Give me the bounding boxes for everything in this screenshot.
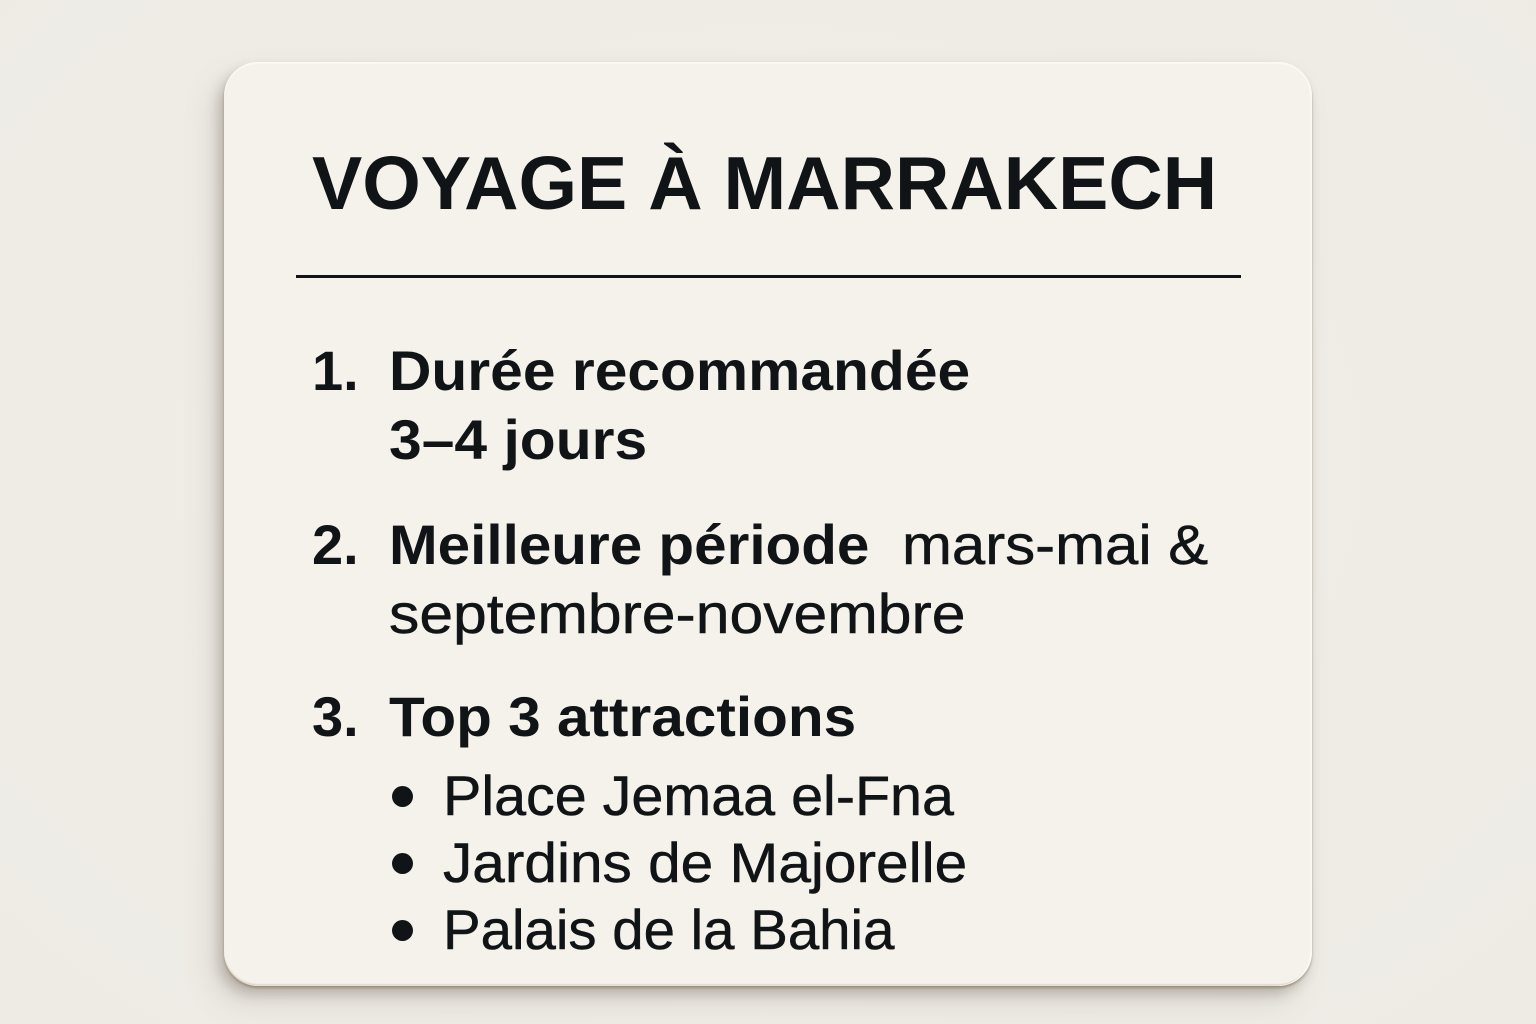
item 1 number: 1. <box>312 339 359 402</box>
item 3 number: 3. <box>312 685 359 748</box>
bullet 2 <box>392 853 413 874</box>
panel: card <box>224 62 1312 986</box>
item 3: top attractions <box>312 685 967 961</box>
item 1: recommended duration <box>312 339 970 471</box>
item 1 heading: Durée recommandée <box>389 339 970 402</box>
item 1 value: 3–4 jours <box>389 408 647 471</box>
item 2 value, first line: mars-mai & <box>902 513 1208 576</box>
item 2 number: 2. <box>312 513 359 576</box>
attraction 2: Jardins de Majorelle <box>443 831 967 894</box>
title: VOYAGE À MARRAKECH <box>312 141 1217 225</box>
attraction 1: Place Jemaa el-Fna <box>443 764 954 827</box>
bullet 3 <box>392 920 413 941</box>
item 2 heading: Meilleure période <box>389 513 869 576</box>
item 3 heading: Top 3 attractions <box>389 685 856 748</box>
item 2: best period <box>312 513 1208 645</box>
divider rule <box>296 275 1241 278</box>
attraction 3: Palais de la Bahia <box>443 898 894 961</box>
bullet 1 <box>392 786 413 807</box>
item 2 value, second line: septembre-novembre <box>389 582 965 645</box>
